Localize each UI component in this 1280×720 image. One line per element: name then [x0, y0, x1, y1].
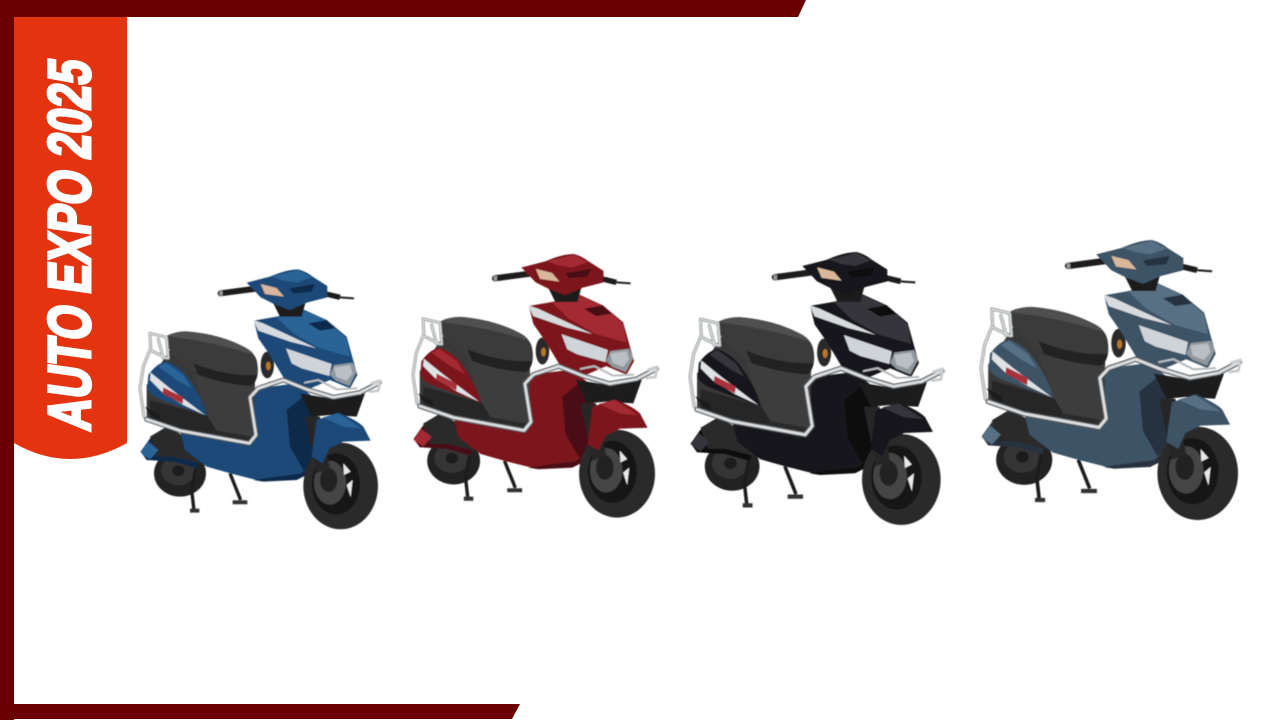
scooter: red — [413, 254, 657, 518]
scooter: slate grey-blue — [981, 240, 1240, 520]
frame: left bar — [0, 0, 14, 720]
scooter: blue — [140, 269, 380, 529]
banner: orange ribbon — [14, 17, 127, 459]
frame: bottom bar — [0, 704, 520, 719]
frame: top bar — [0, 0, 806, 17]
scooter: black — [690, 252, 943, 525]
